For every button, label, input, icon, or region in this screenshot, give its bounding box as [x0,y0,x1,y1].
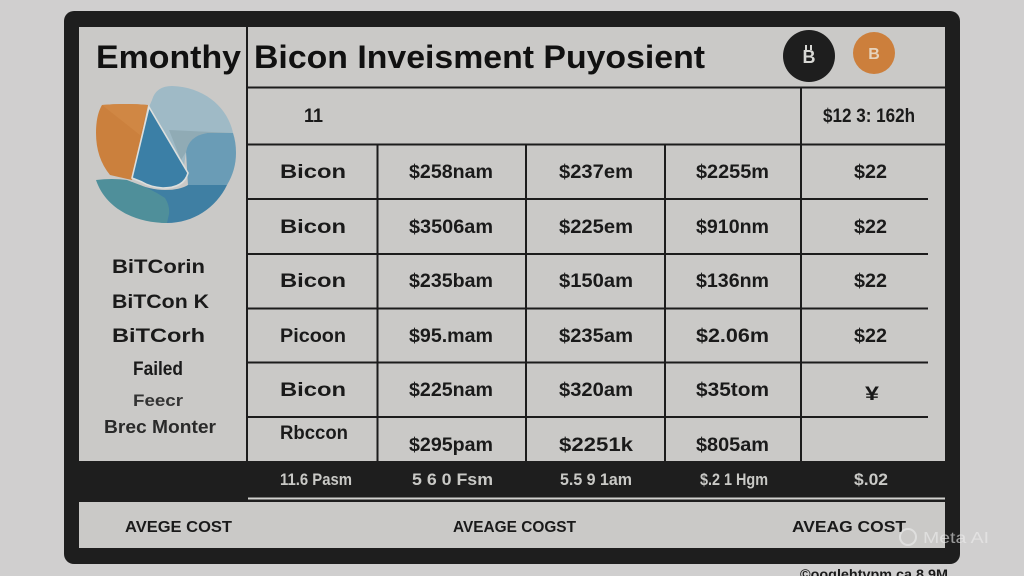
table row 2: $225em [559,217,633,238]
icon: black bitcoin coin [783,30,835,82]
table row 4: $235am [559,326,633,347]
table row 6: $2251k [559,435,633,456]
table row 3: Bicon [280,271,346,292]
sidebar labels: Feecr [133,391,183,410]
table header row: $12 3: 162h [823,106,915,127]
totals band: 5 6 0 Fsm [412,470,493,489]
table row 3: $136nm [696,271,769,292]
title: Bicon Inveisment Puyosient [254,39,705,75]
footer labels: AVEAGE COGST [453,519,576,536]
table row 6: $295pam [409,435,493,456]
icon: orange bitcoin coin: B [868,46,880,63]
table row 2: Bicon [280,217,346,238]
table row 3: $22 [854,271,887,292]
title: Emonthy [96,39,241,75]
table row 5: Bicon [280,380,346,401]
watermark [900,529,989,547]
table row 1 [280,162,887,183]
table row 3: $235bam [409,271,493,292]
icon: black bitcoin coin: B [802,47,816,67]
table row 3 [280,271,887,292]
table row 2: $22 [854,217,887,238]
table row 6: $805am [696,435,769,456]
table row 5: $320am [559,380,633,401]
totals band: 5.5 9 1am [560,470,632,489]
sidebar labels: BiTCorh [112,326,205,347]
table header row [304,106,915,127]
footer labels: AVEAG COST [792,519,906,536]
table grid [247,27,945,461]
table header row: 11 [304,106,323,127]
table row 4: Picoon [280,326,346,347]
table row 4: $2.06m [696,326,769,347]
totals band [248,470,945,500]
sidebar labels: BiTCorin [112,257,205,278]
table row 2 [280,217,887,238]
table row 3: $150am [559,271,633,292]
table row 6 [280,423,769,456]
sidebar labels: Brec Monter [104,417,216,437]
sidebar labels: BiTCon K [112,292,209,313]
table row 6: Rbccon [280,423,348,444]
table row 1: $22 [854,162,887,183]
table row 5: $35tom [696,380,769,401]
table row 5 [280,380,880,405]
totals band: $.02 [854,470,888,489]
table row 2: $3506am [409,217,493,238]
icon: orange bitcoin coin [853,32,895,74]
table row 1: $237em [559,162,633,183]
table row 4: $95.mam [409,326,493,347]
footer labels: AVEGE COST [125,519,232,536]
table row 5: $225nam [409,380,493,401]
sidebar labels: Failed [133,359,183,380]
table row 2: $910nm [696,217,769,238]
watermark: Meta AI [923,530,989,547]
table row 4: $22 [854,326,887,347]
table row 1: Bicon [280,162,346,183]
footer labels [125,519,906,536]
totals band: $.2 1 Hgm [700,470,768,489]
table row 4 [280,326,887,347]
table row 1: $258nam [409,162,493,183]
pie chart [96,86,236,223]
table row 1: $2255m [696,162,769,183]
totals band: 11.6 Pasm [280,470,352,489]
table row 5: ¥ [865,384,880,405]
sidebar labels [104,257,216,437]
